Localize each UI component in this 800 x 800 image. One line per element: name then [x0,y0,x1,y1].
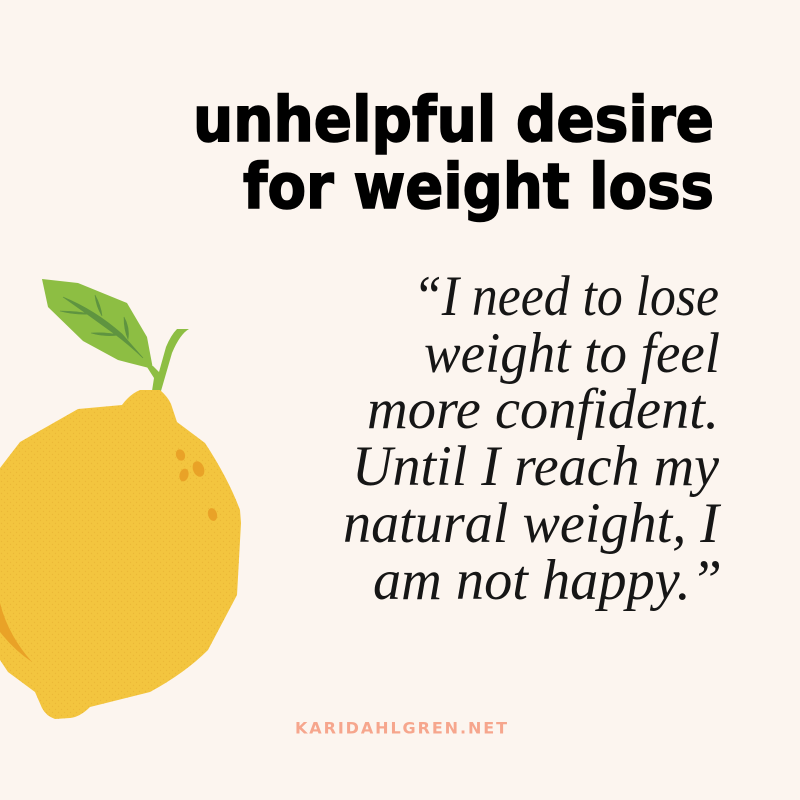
quote text: “I need to lose [413,265,719,328]
quote text: weight to feel [424,322,720,385]
lemon leaf [42,279,153,369]
quote text: more confident. [367,378,719,441]
lemon stem [147,329,189,391]
lemon body [0,390,241,719]
website credit: KARIDAHLGREN.NET [295,718,507,738]
quote text: natural weight, I [343,492,722,555]
lemon spots [174,448,219,522]
title: for weight loss [243,150,714,223]
lemon shadow [0,603,32,662]
lemon texture [0,390,241,719]
quote text: am not happy.” [373,549,722,612]
title: unhelpful desire [193,83,714,156]
quote text: Until I reach my [352,435,720,498]
quote text [343,265,722,612]
title [193,83,714,223]
icon: lemon [0,279,241,719]
